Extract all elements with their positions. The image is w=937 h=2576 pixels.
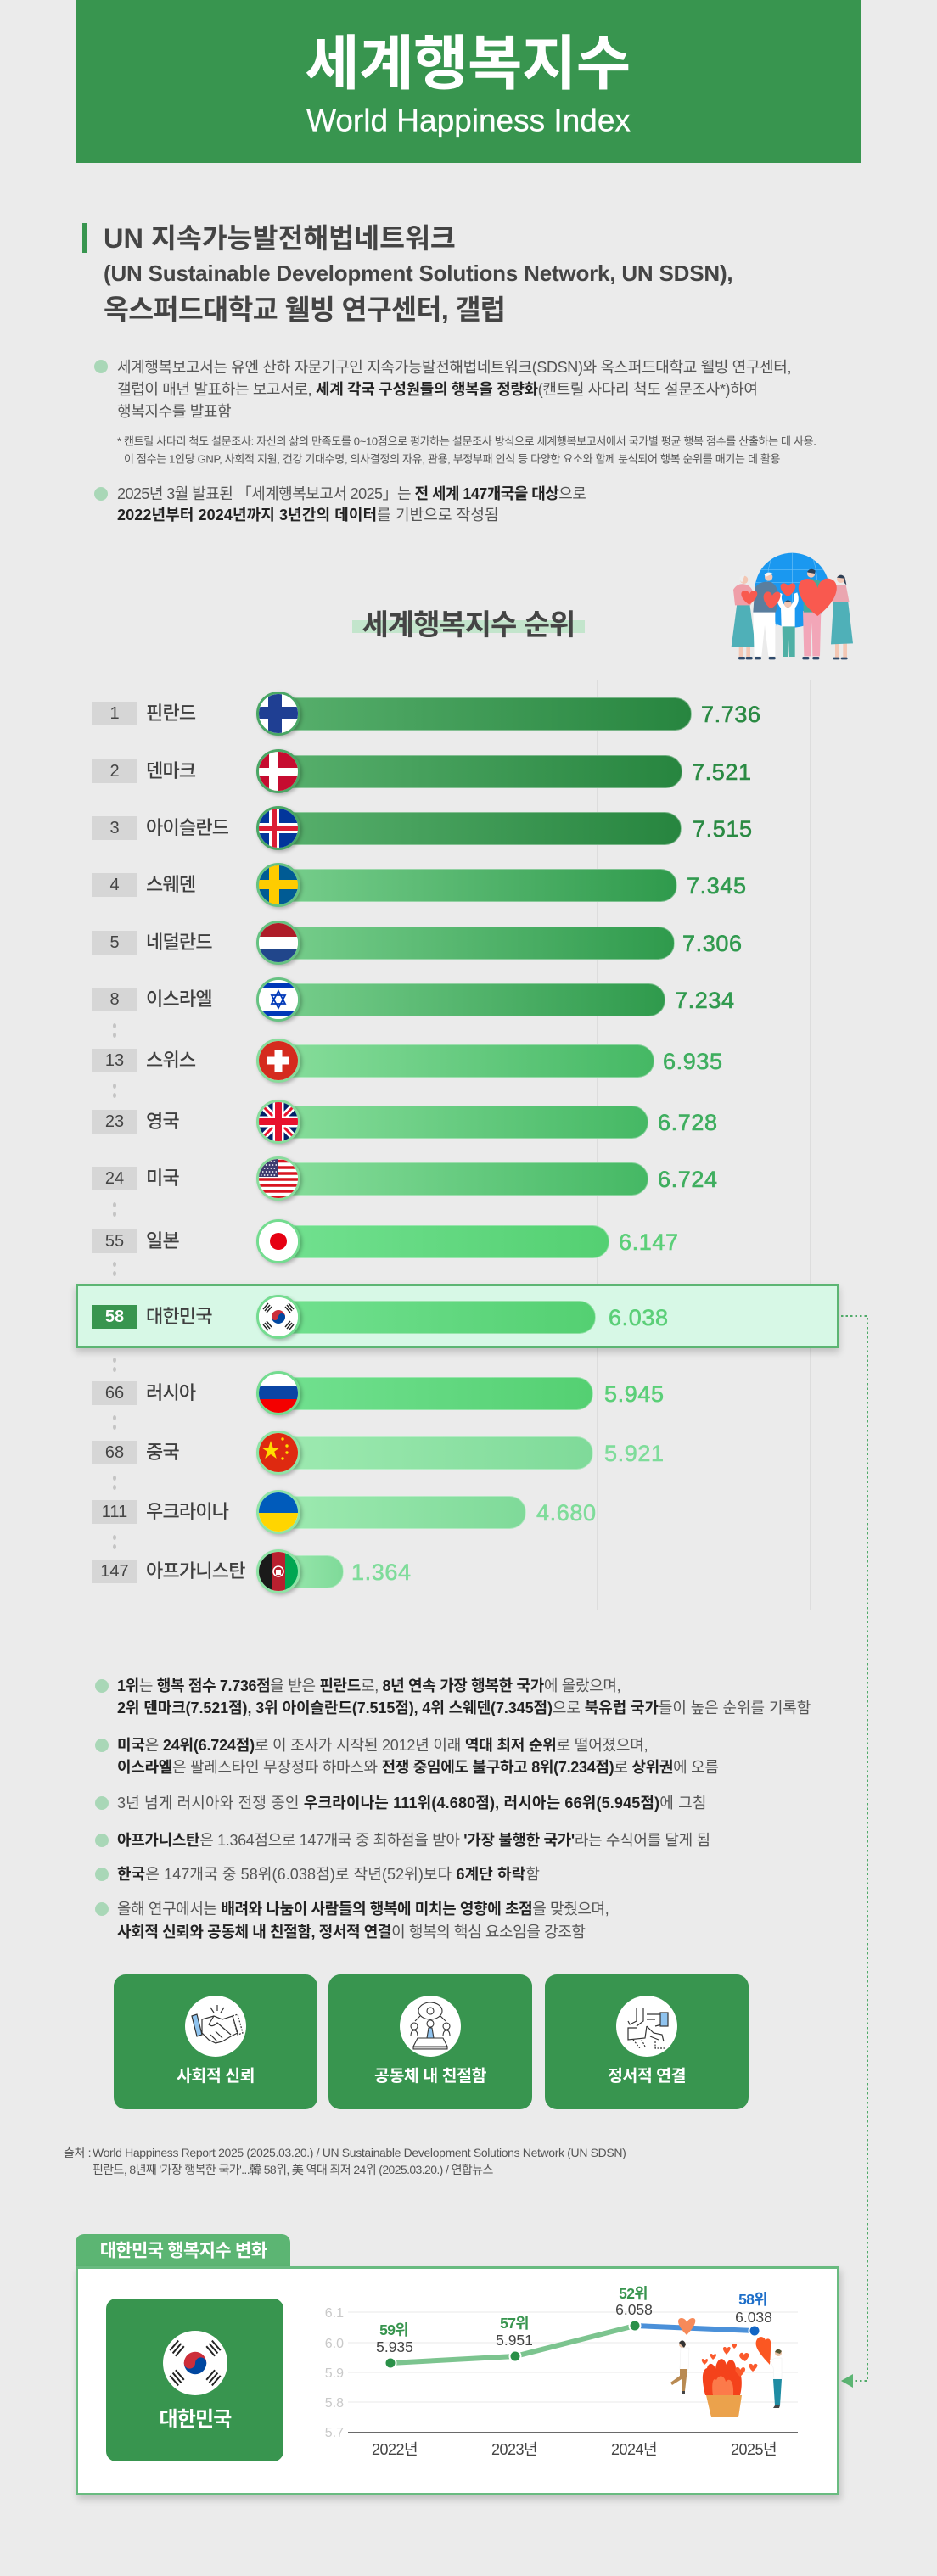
card: community kindness bbox=[328, 1974, 532, 2109]
rank gap dots bbox=[113, 1358, 116, 1372]
title banner bbox=[76, 0, 861, 163]
bullet: Ukraine and Russia: 3년 넘게 러시아와 전쟁 중인 우크라이나는 111위(4.680점), 러시아는 66위(5.945점)에 그침 bbox=[117, 1795, 707, 1812]
value labels bbox=[376, 2301, 772, 2355]
row: Japan: 6.147 bbox=[619, 1229, 679, 1255]
intro bullet 2 bbox=[94, 485, 586, 524]
label: 공동체 내 친절함 bbox=[374, 2067, 486, 2086]
row: Switzerland: 6.935 bbox=[663, 1049, 723, 1074]
title: 세계행복지수 bbox=[305, 31, 631, 97]
x axis labels: 2025년 bbox=[731, 2441, 777, 2458]
row: United States: 미국 bbox=[146, 1168, 179, 1189]
row: Netherlands: 5 bbox=[109, 933, 120, 952]
source: 핀란드, 8년째 '가장 행복한 국가'...韓 58위, 美 역대 최저 24위 (2025.03.20.) / 연합뉴스 bbox=[93, 2163, 493, 2176]
ranking heading: 세계행복지수 순위 bbox=[362, 609, 575, 641]
row: Japan bbox=[92, 1218, 679, 1268]
trend panel bbox=[76, 2266, 839, 2495]
rank gap dots bbox=[113, 1476, 116, 1490]
vertical grid lines bbox=[384, 680, 811, 1610]
row: Russia bbox=[92, 1371, 665, 1419]
section heading accent bar bbox=[82, 223, 87, 253]
icon: community meeting bbox=[400, 1996, 461, 2057]
rank labels: 57위 bbox=[500, 2315, 529, 2332]
illustration: family with globe and hearts bbox=[732, 553, 853, 660]
bullet: USA and Israel bbox=[95, 1737, 719, 1776]
row: Switzerland bbox=[92, 1039, 723, 1086]
row: Sweden bbox=[92, 862, 747, 911]
row: United Kingdom: 23 bbox=[105, 1112, 124, 1131]
bullet: USA and Israel: 미국은 24위(6.724점)로 이 조사가 시작된 2012년 이래 역대 최저 순위로 떨어졌으며, bbox=[117, 1737, 648, 1754]
bullet: Finland and Nordics bbox=[95, 1677, 811, 1716]
row: China: 중국 bbox=[146, 1442, 179, 1463]
row: South Korea: 58 bbox=[105, 1308, 124, 1326]
row: Iceland bbox=[92, 806, 753, 854]
row: South Korea: 대한민국 bbox=[146, 1306, 212, 1327]
y axis labels: 5.8 bbox=[325, 2396, 344, 2411]
row: China: 68 bbox=[105, 1443, 124, 1462]
row: Israel: 7.234 bbox=[675, 988, 735, 1013]
x axis labels: 2023년 bbox=[491, 2441, 537, 2458]
intro bullet 1 bbox=[94, 359, 791, 420]
row: Netherlands: 7.306 bbox=[682, 931, 743, 956]
rank labels: 59위 bbox=[379, 2321, 408, 2338]
bullet: Finland and Nordics: 2위 덴마크(7.521점), 3위 아이슬란드(7.515점), 4위 스웨덴(7.345점)으로 북유럽 국가들이 높은 순위를 기록함 bbox=[117, 1700, 811, 1716]
row: Ukraine bbox=[92, 1490, 597, 1537]
y axis labels: 5.7 bbox=[325, 2426, 344, 2440]
row: Iceland: 3 bbox=[109, 819, 120, 837]
footnote bbox=[117, 434, 816, 465]
row: Afghanistan: 아프가니스탄 bbox=[146, 1560, 245, 1582]
row: Finland: 1 bbox=[109, 704, 120, 723]
rank labels: 58위 bbox=[738, 2291, 767, 2308]
row: Finland: 핀란드 bbox=[146, 703, 195, 724]
y axis labels bbox=[325, 2306, 344, 2440]
bullet: Finland and Nordics: 1위는 행복 점수 7.736점을 받은 핀란드로, 8년 연속 가장 행복한 국가에 올랐으며, bbox=[117, 1677, 620, 1694]
rank gap dots bbox=[113, 1535, 116, 1549]
row: Switzerland: 스위스 bbox=[146, 1050, 195, 1071]
card: social trust bbox=[114, 1974, 317, 2109]
row: Netherlands: 네덜란드 bbox=[146, 932, 212, 953]
rank gap dots bbox=[113, 1023, 116, 1038]
label: 정서적 연결 bbox=[608, 2067, 686, 2086]
rank gap dots bbox=[113, 1202, 116, 1217]
row: Netherlands bbox=[92, 920, 743, 969]
y axis labels: 5.9 bbox=[325, 2366, 344, 2381]
row: Ukraine: 우크라이나 bbox=[146, 1501, 228, 1522]
row: Ukraine: 4.680 bbox=[536, 1500, 597, 1526]
bullet: USA and Israel: 이스라엘은 팔레스타인 무장정파 하마스와 전쟁 중임에도 불구하고 8위(7.234점)로 상위권에 오름 bbox=[117, 1759, 719, 1776]
bullet: Afghanistan: 아프가니스탄은 1.364점으로 147개국 중 최하점을 받아 '가장 불행한 국가'라는 수식어를 달게 됨 bbox=[117, 1832, 710, 1849]
illustration: couple with basket of hearts bbox=[662, 2312, 789, 2422]
row: Sweden: 7.345 bbox=[687, 873, 747, 899]
y axis labels: 6.1 bbox=[325, 2306, 344, 2321]
intro bullet 2: 2022년부터 2024년까지 3년간의 데이터를 기반으로 작성됨 bbox=[117, 507, 499, 524]
rank gap dots bbox=[113, 1084, 116, 1098]
row: Russia: 66 bbox=[105, 1384, 124, 1403]
row: United Kingdom: 6.728 bbox=[658, 1110, 718, 1135]
x axis labels: 2022년 bbox=[372, 2441, 418, 2458]
subtitle: World Happiness Index bbox=[306, 104, 631, 137]
value labels: 6.058 bbox=[615, 2301, 653, 2318]
row: Sweden: 스웨덴 bbox=[146, 874, 195, 895]
label: 사회적 신뢰 bbox=[177, 2067, 255, 2086]
row: Afghanistan bbox=[92, 1549, 412, 1597]
row: Iceland: 7.515 bbox=[693, 816, 753, 842]
row: United Kingdom bbox=[92, 1100, 718, 1147]
row: Denmark: 2 bbox=[109, 762, 120, 781]
bullet: focus of research: 사회적 신뢰와 공동체 내 친절함, 정서적 연결이 행복의 핵심 요소임을 강조함 bbox=[117, 1924, 586, 1940]
row: Switzerland: 13 bbox=[105, 1051, 124, 1070]
value labels: 6.038 bbox=[735, 2309, 772, 2326]
row: South Korea bbox=[92, 1295, 669, 1342]
line chart: Korea happiness index 2022–2025 bbox=[325, 2285, 798, 2458]
row: Israel: 8 bbox=[109, 990, 120, 1009]
trend line 2024-2025 bbox=[635, 2326, 755, 2331]
label: 대한민국 bbox=[159, 2408, 232, 2431]
row: Finland bbox=[92, 691, 761, 740]
y axis labels: 6.0 bbox=[325, 2337, 344, 2351]
intro bullet 2: 2025년 3월 발표된 「세계행복보고서 2025」는 전 세계 147개국을 대상으로 bbox=[117, 485, 586, 502]
row: Japan: 55 bbox=[105, 1232, 124, 1251]
intro bullet 1: 세계행복보고서는 유엔 산하 자문기구인 지속가능발전해법네트워크(SDSN)와 옥스퍼드대학교 웰빙 연구센터, bbox=[117, 359, 791, 376]
row: United States: 6.724 bbox=[658, 1167, 718, 1192]
source: 출처 : bbox=[64, 2146, 91, 2159]
x axis labels: 2024년 bbox=[611, 2441, 657, 2458]
panel: Korea card bbox=[106, 2299, 283, 2461]
bullet: Korea: 한국은 147개국 중 58위(6.038점)로 작년(52위)보다 6계단 하락함 bbox=[117, 1866, 540, 1883]
intro bullet 1: 행복지수를 발표함 bbox=[117, 403, 231, 420]
trend panel tab bbox=[76, 2234, 290, 2267]
section heading: (UN Sustainable Development Solutions Network, UN SDSN), bbox=[104, 260, 732, 286]
source bbox=[64, 2146, 626, 2176]
section heading: UN 지속가능발전해법네트워크 bbox=[104, 223, 456, 254]
source: World Happiness Report 2025 (2025.03.20.) / UN Sustainable Development Solutions Network (UN SDSN) bbox=[93, 2146, 626, 2159]
row: Denmark: 7.521 bbox=[692, 759, 752, 785]
row: South Korea: 6.038 bbox=[609, 1305, 669, 1330]
findings: bullet list bbox=[95, 1677, 811, 1940]
bullet: focus of research: 올해 연구에서는 배려와 나눔이 사람들의 행복에 미치는 영향에 초점을 맞췄으며, bbox=[117, 1901, 609, 1918]
row: Afghanistan: 147 bbox=[100, 1562, 129, 1581]
icon: joined hands bbox=[616, 1996, 677, 2057]
connector: dotted arrow from Korea row to trend panel bbox=[841, 1315, 868, 2388]
row: Denmark: 덴마크 bbox=[146, 760, 195, 781]
highlighted row box: South Korea bbox=[76, 1284, 839, 1348]
row: United Kingdom: 영국 bbox=[146, 1111, 179, 1132]
row: Russia: 러시아 bbox=[146, 1382, 195, 1403]
row: Denmark bbox=[92, 748, 752, 798]
bullet: focus of research bbox=[95, 1901, 609, 1940]
card: emotional connection bbox=[545, 1974, 749, 2109]
footnote: 이 점수는 1인당 GNP, 사회적 지원, 건강 기대수명, 의사결정의 자유, 관용, 부정부패 인식 등 다양한 요소와 함께 분석되어 행복 순위를 매기는 데 활용 bbox=[124, 453, 780, 465]
row: Afghanistan: 1.364 bbox=[351, 1560, 412, 1585]
row: Sweden: 4 bbox=[109, 876, 120, 894]
row: Finland: 7.736 bbox=[701, 702, 761, 727]
rank gap dots bbox=[113, 1415, 116, 1430]
row: Israel: 이스라엘 bbox=[146, 988, 212, 1010]
trend line 2022-2024 bbox=[390, 2326, 635, 2363]
section heading bbox=[104, 223, 732, 325]
icon: Korean flag bbox=[163, 2331, 227, 2395]
row: Israel bbox=[92, 977, 735, 1025]
rank gap dots bbox=[113, 1262, 116, 1276]
icon: handshake bbox=[185, 1996, 246, 2057]
row: China bbox=[92, 1431, 665, 1478]
row: Iceland: 아이슬란드 bbox=[146, 817, 228, 838]
row: Ukraine: 111 bbox=[102, 1503, 127, 1521]
x axis labels bbox=[372, 2441, 777, 2458]
data points bbox=[385, 2320, 760, 2369]
row: United States: 24 bbox=[105, 1169, 124, 1188]
row: United States bbox=[92, 1156, 718, 1205]
trend panel tab: 대한민국 행복지수 변화 bbox=[100, 2242, 267, 2260]
intro bullet 1: 갤럽이 매년 발표하는 보고서로, 세계 각국 구성원들의 행복을 정량화(캔트릴 사다리 척도 설문조사*)하여 bbox=[117, 381, 758, 398]
section heading: 옥스퍼드대학교 웰빙 연구센터, 갤럽 bbox=[104, 294, 505, 325]
rank labels: 52위 bbox=[619, 2285, 648, 2302]
row: China: 5.921 bbox=[604, 1441, 665, 1466]
value labels: 5.951 bbox=[496, 2332, 533, 2349]
row: Russia: 5.945 bbox=[604, 1381, 665, 1407]
footnote: * 캔트릴 사다리 척도 설문조사: 자신의 삶의 만족도를 0~10점으로 평가하는 설문조사 방식으로 세계행복보고서에서 국가별 평균 행복 점수를 산출하는 데 사용. bbox=[117, 434, 816, 448]
value labels: 5.935 bbox=[376, 2338, 413, 2355]
rank labels bbox=[379, 2285, 767, 2338]
row: Japan: 일본 bbox=[146, 1230, 179, 1252]
